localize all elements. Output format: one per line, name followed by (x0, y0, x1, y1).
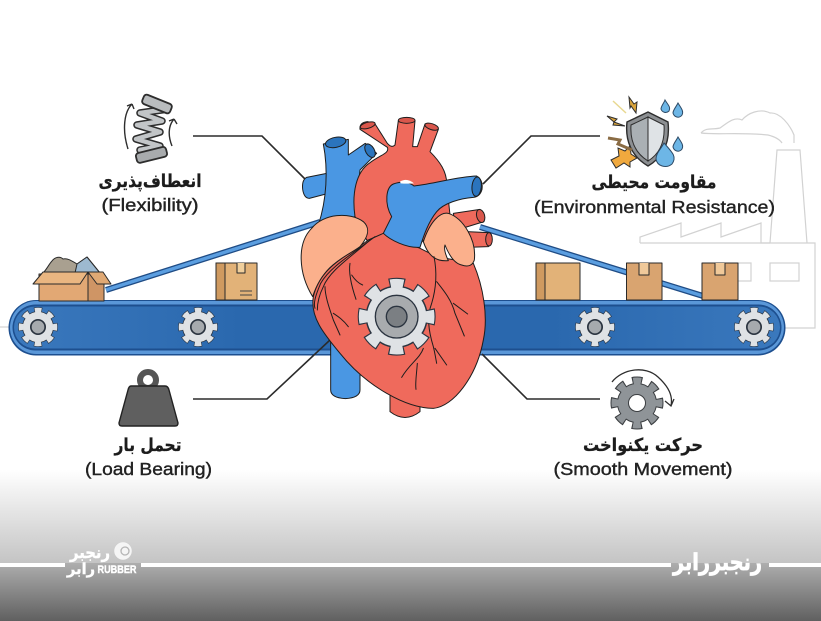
pulmonary opening (471, 177, 482, 197)
logo: left brand (66, 542, 137, 578)
right strap (480, 227, 703, 296)
logo: right brand: رنجبررابر (672, 550, 762, 576)
leader line: environmental resistance (483, 136, 600, 184)
icon: weight (119, 372, 178, 426)
open box with raw material (33, 257, 111, 301)
right atrium (423, 213, 475, 266)
superior vena cava (302, 135, 377, 225)
cardboard box 3 (626, 263, 662, 300)
heart illustration (301, 117, 492, 417)
leader line: smooth movement (482, 354, 600, 399)
label: flexibility (98, 171, 202, 215)
aortic branch ends (359, 117, 439, 132)
label: smooth movement: حرکت یکنواخت (583, 435, 703, 456)
central gear (363, 283, 430, 350)
left strap (106, 222, 320, 290)
lower aorta stub (390, 387, 420, 417)
pulmonary artery (383, 176, 482, 247)
icon: rotating gear (612, 370, 674, 424)
label: smooth movement: (Smooth Movement) (554, 459, 732, 479)
leader line: flexibility (193, 136, 305, 179)
label: flexibility: انعطاف‌پذیری (98, 171, 202, 192)
gear: belt roller 4 (737, 310, 771, 344)
label: load bearing: تحمل بار (114, 435, 182, 456)
logo: left brand: رابر (66, 560, 95, 578)
arch gap (400, 180, 414, 184)
label: environmental resistance (534, 172, 775, 217)
label: flexibility: (Flexibility) (102, 195, 198, 215)
label: smooth movement (554, 435, 732, 479)
aorta arch (354, 118, 450, 250)
label: load bearing (85, 435, 212, 479)
inferior vena cava (331, 333, 360, 399)
footer line (0, 563, 821, 567)
icon: shield with weather (607, 97, 683, 168)
gear: belt roller 2 (181, 310, 215, 344)
logo: left brand: RUBBER (98, 564, 137, 576)
icon: spring (125, 94, 177, 163)
label: environmental resistance: مقاومت محیطی (592, 172, 716, 193)
label: environmental resistance: (Environmental Resistance) (534, 197, 775, 217)
leader line: load bearing (193, 340, 330, 399)
cardboard box 4 (702, 263, 738, 300)
logo: left brand: رنجبر (69, 543, 110, 562)
right arteries (453, 209, 492, 247)
gear: belt roller 3 (578, 310, 612, 344)
conveyor belt (8, 300, 786, 356)
coronary vessels (314, 237, 468, 389)
heart body (313, 233, 485, 408)
cardboard box 2 (536, 263, 580, 300)
label: load bearing: (Load Bearing) (85, 459, 212, 479)
cardboard box 1 (216, 263, 257, 300)
gear: belt roller 1 (21, 310, 55, 344)
left atrium (301, 215, 368, 297)
factory outline (0, 111, 815, 328)
